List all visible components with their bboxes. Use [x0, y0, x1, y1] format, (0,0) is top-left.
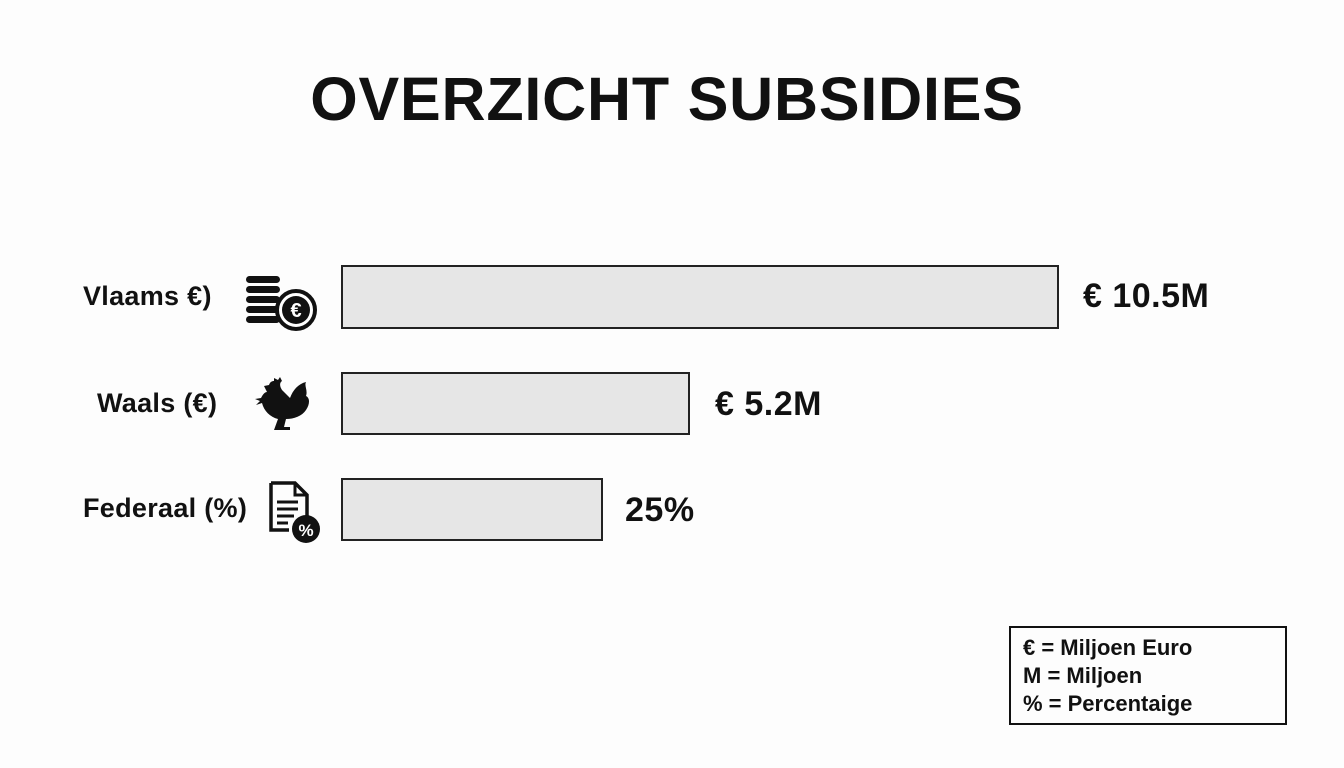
- bar: Federaal: [341, 478, 603, 541]
- value: Federaal: 25%: [625, 491, 695, 529]
- icon: document with percent: %: [298, 521, 314, 540]
- legend: [1009, 626, 1287, 725]
- icon: rooster: [255, 377, 309, 430]
- value: Waals: € 5.2M: [715, 385, 822, 423]
- row: Waals: [97, 372, 822, 435]
- bar: Vlaams: [341, 265, 1059, 329]
- value: Vlaams: € 10.5M: [1083, 277, 1209, 315]
- icon: document with percent: [269, 481, 320, 543]
- bar: Waals: [341, 372, 690, 435]
- label: Federaal: Federaal (%): [83, 493, 247, 523]
- title: OVERZICHT SUBSIDIES: [310, 65, 1024, 133]
- row: Vlaams: [83, 265, 1209, 331]
- label: Vlaams: Vlaams €): [83, 281, 212, 311]
- icon: coins with euro: [246, 276, 317, 331]
- legend: M = Miljoen: [1023, 663, 1142, 688]
- row: Federaal: [83, 478, 695, 543]
- icon: coins with euro: €: [290, 300, 302, 322]
- legend: % = Percentaige: [1023, 691, 1192, 716]
- label: Waals: Waals (€): [97, 388, 217, 418]
- legend: € = Miljoen Euro: [1023, 635, 1192, 660]
